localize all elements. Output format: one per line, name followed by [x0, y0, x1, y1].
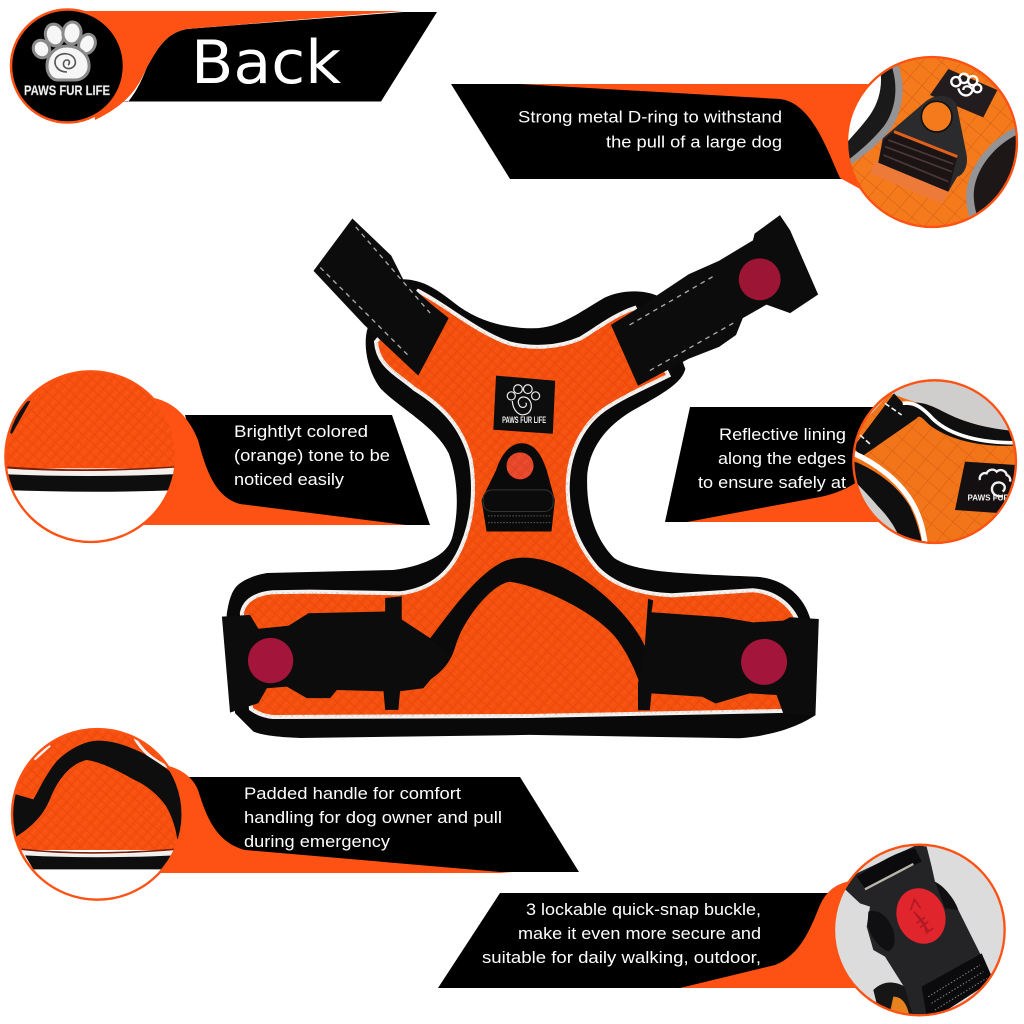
harness body outline: [227, 279, 815, 738]
callout text: orange tone: [234, 422, 390, 489]
detail photo: padded handle: [7, 727, 190, 900]
callout: bright orange tone: [0, 367, 430, 542]
D-ring: [482, 443, 555, 531]
callout text: D-ring: the pull of a large dog: [606, 132, 782, 152]
callout text: reflective lining: to ensure safely at: [698, 473, 846, 492]
detail photo: reflective edge: PAWS FUR: [967, 493, 1010, 503]
right waist strap and buckle: [638, 599, 819, 715]
detail photo: orange mesh: [0, 367, 187, 542]
buckle button: [739, 258, 781, 300]
callout text: D-ring: [518, 108, 782, 152]
left shoulder strap: [314, 218, 449, 376]
callout banner: [150, 765, 579, 873]
callout: D-ring: [451, 50, 1024, 237]
callout text: orange tone: noticed easily: [234, 470, 345, 489]
callout text: D-ring: Strong metal D-ring to withstand: [518, 108, 782, 126]
harness product photo: [222, 215, 819, 738]
callout: reflective lining: [665, 377, 1023, 557]
callout banner: [140, 397, 430, 525]
callout text: orange tone: (orange) tone to be: [234, 446, 390, 465]
detail photo: reflective edge: [852, 379, 1018, 544]
callout text: padded handle: during emergency: [244, 832, 391, 851]
logo badge: Paws Fur Life: [11, 10, 124, 122]
left buckle button: [248, 638, 293, 683]
callout text: orange tone: Brightlyt colored: [234, 422, 368, 441]
detail photo: D-ring: [848, 56, 1018, 228]
right buckle button: [741, 639, 787, 685]
logo patch: [493, 376, 555, 434]
callout: quick-snap buckle: [438, 845, 1005, 1020]
orange mesh body with reflective edge: [242, 291, 797, 717]
left waist strap and buckle: [222, 596, 450, 713]
logo badge: Paws Fur Life: PAWS FUR LIFE: [24, 82, 110, 98]
header banner: Back: [85, 11, 437, 120]
callout text: buckle: [482, 900, 761, 967]
callout text: reflective lining: [698, 425, 846, 492]
callout banner: [451, 84, 870, 196]
callout banner: [438, 881, 870, 988]
detail photo: buckle: [834, 845, 1005, 1020]
callout text: buckle: suitable for daily walking, outdoor,: [482, 948, 761, 967]
padded handle: [402, 558, 652, 690]
heading: Back: Back: [191, 28, 341, 98]
right shoulder strap and buckle: [611, 215, 818, 386]
callout banner: [665, 407, 890, 522]
callout text: padded handle: Padded handle for comfort: [244, 784, 461, 803]
callout text: buckle: make it even more secure and: [518, 924, 761, 943]
callout: padded handle: [7, 727, 579, 900]
callout text: buckle: 3 lockable quick-snap buckle,: [526, 900, 761, 919]
callout text: reflective lining: Reflective lining: [719, 425, 846, 444]
callout text: padded handle: handling for dog owner and pull: [244, 808, 502, 827]
callout text: reflective lining: along the edges: [718, 449, 846, 468]
callout text: padded handle: [244, 784, 502, 851]
logo patch: PAWS FUR LIFE: [502, 415, 546, 425]
